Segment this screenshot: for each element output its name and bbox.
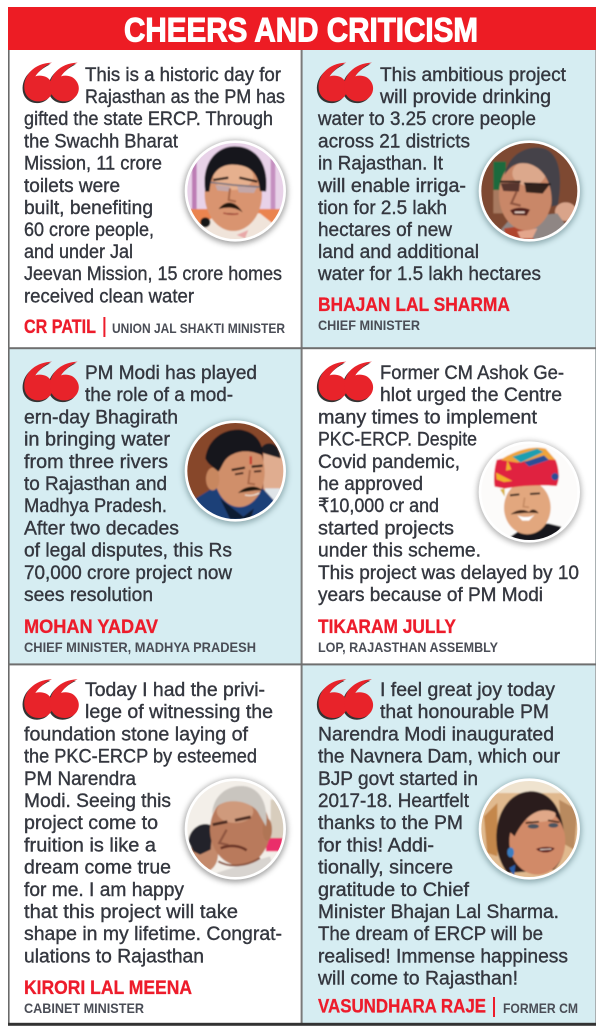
icon: quote mark <box>23 362 79 402</box>
quote text: that honourable PM <box>380 701 549 723</box>
panel: Mohan Yadav <box>23 362 293 655</box>
quote text: water to 3.25 crore people <box>317 108 536 130</box>
quote text: hlot urged the Centre <box>380 384 562 406</box>
quote text: and under Jal <box>24 241 133 263</box>
attribution: Tikaram Jully: LOP, RAJASTHAN ASSEMBLY <box>318 639 499 655</box>
quote text: land and additional <box>318 241 479 263</box>
quote text: started projects <box>318 517 454 539</box>
quote text: gratitude to Chief <box>318 879 469 901</box>
quote text: tion for 2.5 lakh <box>318 197 447 219</box>
icon: quote mark <box>23 63 79 103</box>
quote text: for me. I am happy <box>24 879 184 901</box>
quote text: Mission, 11 crore <box>24 153 162 175</box>
quote text: he approved <box>318 473 423 495</box>
quote text: I feel great joy today <box>380 679 555 701</box>
quote text: of legal disputes, this Rs <box>24 540 232 562</box>
quote text: for this! Addi- <box>318 834 434 856</box>
quote text: water for 1.5 lakh hectares <box>317 263 541 285</box>
attribution: Bhajan Lal Sharma: CHIEF MINISTER <box>318 317 420 333</box>
quote text: tionally, sincere <box>318 857 453 879</box>
attribution: Tikaram Jully <box>318 616 499 655</box>
quote text: This ambitious project <box>380 64 566 86</box>
quote text: Former CM Ashok Ge- <box>380 362 564 384</box>
title banner <box>8 7 596 50</box>
quote text: that this project will take <box>24 901 238 923</box>
attribution: Kirori Lal Meena: KIRORI LAL MEENA <box>24 977 192 999</box>
portrait: CR Patil <box>180 135 293 249</box>
attribution: Bhajan Lal Sharma: BHAJAN LAL SHARMA <box>318 294 510 316</box>
quote text: shape in my lifetime. Congrat- <box>24 923 282 945</box>
quote text: Jeevan Mission, 15 crore homes <box>24 263 282 285</box>
quote text: will come to Rajasthan! <box>317 968 518 990</box>
icon: quote mark <box>23 679 79 720</box>
quote text: This is a historic day for <box>85 64 281 86</box>
portrait: Tikaram Jully <box>474 436 587 549</box>
quote text: hectares of new <box>318 219 453 241</box>
panel: Kirori Lal Meena <box>23 679 293 1016</box>
quote text: in bringing water <box>24 429 170 451</box>
quote text: 2017-18. Heartfelt <box>318 790 469 812</box>
quote text <box>24 679 282 967</box>
quote text <box>317 64 566 285</box>
quote text: built, benefiting <box>24 197 153 219</box>
panel: Vasundhara Raje <box>317 679 587 1018</box>
quote text: PM Modi has played <box>85 362 257 384</box>
quote text: the Navnera Dam, which our <box>318 746 560 768</box>
quote text: toilets were <box>24 175 120 197</box>
attribution: Mohan Yadav <box>24 616 256 655</box>
quote text: ₹10,000 cr and <box>318 495 439 517</box>
portrait: Bhajan Lal Sharma <box>474 135 587 248</box>
quote text: Madhya Pradesh. <box>24 495 167 517</box>
quote text: thanks to the PM <box>318 812 463 834</box>
attribution: Mohan Yadav: MOHAN YADAV <box>24 616 158 638</box>
panel: CR Patil <box>23 63 293 338</box>
quote text: realised! Immense happiness <box>318 945 568 967</box>
quote text: years because of PM Modi <box>318 584 543 606</box>
quote text: Covid pandemic, <box>318 451 460 473</box>
attribution: CR Patil: CR PATIL <box>24 316 96 338</box>
quote text: Minister Bhajan Lal Sharma. <box>318 901 559 923</box>
quote text: 70,000 crore project now <box>24 562 233 584</box>
quote text: under this scheme. <box>318 540 481 562</box>
attribution: CR Patil: UNION JAL SHAKTI MINISTER <box>112 320 285 336</box>
quote text: dream come true <box>24 857 171 879</box>
quote text: will enable irriga- <box>317 175 466 197</box>
quote text: the PKC-ERCP by esteemed <box>24 746 257 768</box>
quote text: foundation stone laying of <box>24 723 248 745</box>
quote text <box>24 64 285 308</box>
attribution: Mohan Yadav: CHIEF MINISTER, MADHYA PRADESH <box>24 639 256 655</box>
quote text: Today I had the privi- <box>85 679 265 701</box>
quote text: Narendra Modi inaugurated <box>318 723 554 745</box>
attribution: Vasundhara Raje: VASUNDHARA RAJE <box>318 996 486 1018</box>
quote text: gifted the state ERCP. Through <box>24 108 273 130</box>
icon: quote mark <box>317 362 373 402</box>
portrait: Mohan Yadav <box>180 415 293 528</box>
quote text: BJP govt started in <box>318 768 478 790</box>
quote text <box>24 362 257 606</box>
quote text: to Rajasthan and <box>24 473 167 495</box>
attribution: Kirori Lal Meena <box>24 977 192 1016</box>
attribution: CR Patil <box>24 316 285 338</box>
attribution: Kirori Lal Meena: CABINET MINISTER <box>24 1000 144 1016</box>
attribution: Vasundhara Raje: FORMER CM <box>503 1000 578 1016</box>
icon: quote mark <box>317 679 373 720</box>
quote text <box>318 362 579 606</box>
quote text: After two decades <box>24 517 179 539</box>
quote text: received clean water <box>24 286 194 308</box>
quote text: PKC-ERCP. Despite <box>318 429 477 451</box>
quote text: ulations to Rajasthan <box>24 945 204 967</box>
panel: Bhajan Lal Sharma <box>317 63 587 333</box>
quote text: Modi. Seeing this <box>24 790 171 812</box>
icon: quote mark <box>317 63 373 103</box>
quote text: PM Narendra <box>24 768 136 790</box>
quote text: fruition is like a <box>24 834 156 856</box>
quote text: sees resolution <box>24 584 153 606</box>
quote text: in Rajasthan. It <box>318 153 443 175</box>
quote text: the Swachh Bharat <box>24 130 178 152</box>
title banner: CHEERS AND CRITICISM <box>124 12 478 50</box>
quote text: the role of a mod- <box>85 384 233 406</box>
quote text: from three rivers <box>24 451 168 473</box>
quote text: ern-day Bhagirath <box>24 406 178 428</box>
quote text: 60 crore people, <box>24 219 154 241</box>
portrait: Vasundhara Raje <box>474 773 587 886</box>
quote text <box>317 679 568 990</box>
quote text: project come to <box>24 812 158 834</box>
quote text: many times to implement <box>318 406 537 428</box>
quote text: will provide drinking <box>379 86 551 108</box>
quote text: across 21 districts <box>318 130 470 152</box>
quote text: The dream of ERCP will be <box>318 923 543 945</box>
quote text: lege of witnessing the <box>85 701 273 723</box>
attribution: Tikaram Jully: TIKARAM JULLY <box>318 616 456 638</box>
attribution: Bhajan Lal Sharma <box>318 294 510 333</box>
quote text: Rajasthan as the PM has <box>85 86 285 108</box>
portrait: Kirori Lal Meena <box>180 773 293 886</box>
quote text: This project was delayed by 10 <box>318 562 579 584</box>
panel: Tikaram Jully <box>317 362 587 655</box>
